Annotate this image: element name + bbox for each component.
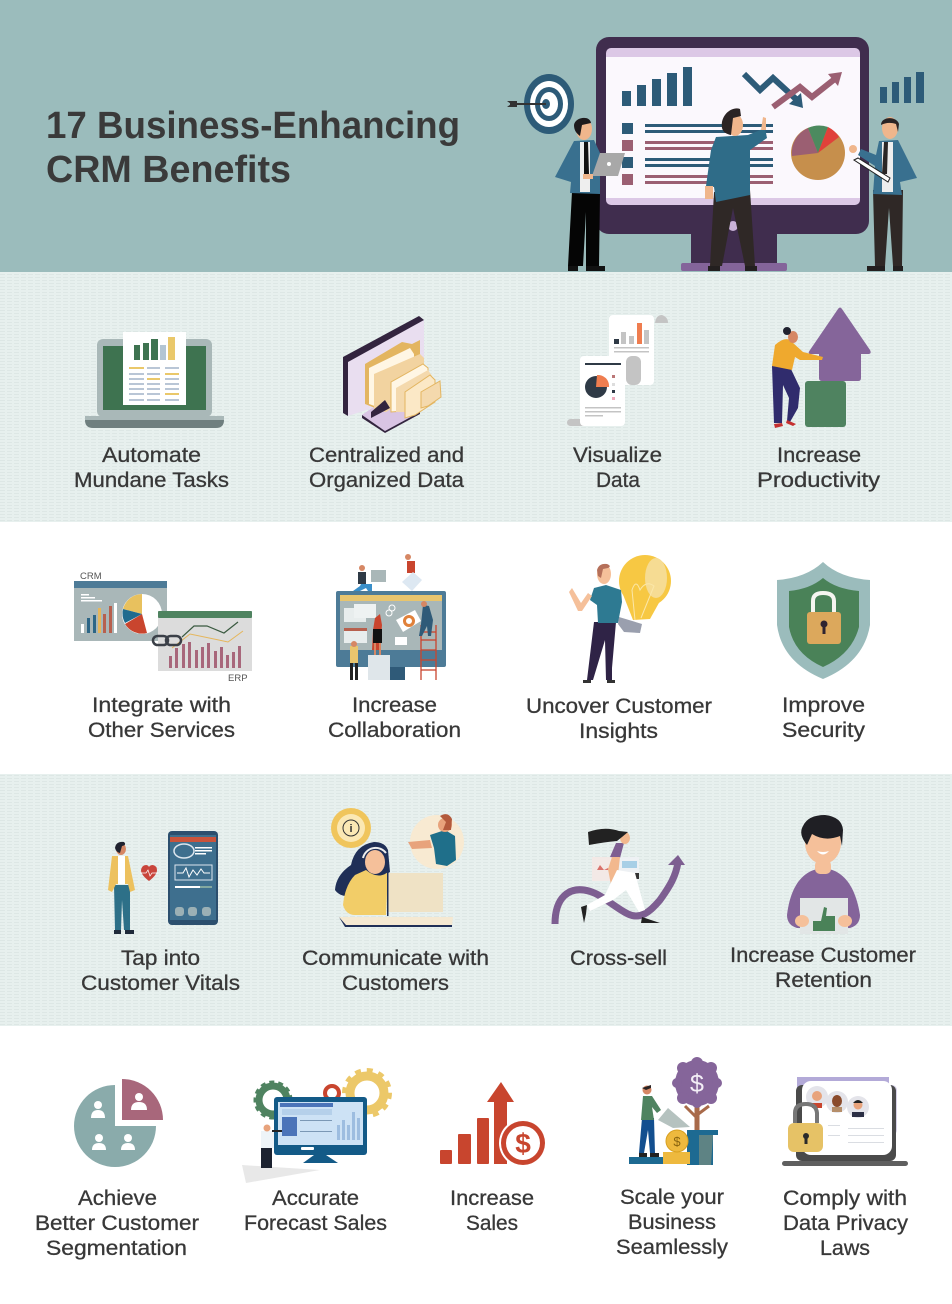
label: Improve: [782, 694, 865, 717]
item: Increase Sales: [440, 1082, 547, 1235]
label: [302, 947, 489, 995]
label: Cross-sell: [570, 947, 667, 970]
item: Improve Security: [777, 562, 870, 742]
label: Tap into: [121, 947, 200, 970]
label: Segmentation: [46, 1237, 187, 1260]
label: [74, 444, 229, 492]
label: Centralized and: [309, 444, 464, 467]
label: Other Services: [88, 719, 235, 742]
label: [526, 695, 712, 743]
icon: monitor with gears: [242, 1070, 390, 1183]
label: Accurate: [272, 1187, 359, 1210]
label: Business: [628, 1211, 716, 1234]
icon: segmented pie with people: [74, 1079, 163, 1167]
label: Scale your: [620, 1186, 724, 1209]
small bar chart right: [880, 72, 924, 103]
arrow: zigzag up: [773, 72, 842, 107]
item: Communicate with Customers: [302, 808, 489, 995]
label: Seamlessly: [616, 1236, 729, 1259]
icon: support agent and caller: i: [349, 823, 353, 835]
item: Comply with Data Privacy Laws: [782, 1077, 909, 1260]
label: Automate: [102, 444, 201, 467]
icon: woman pushing arrow: [772, 308, 871, 428]
icon: CRM and ERP windows: [74, 571, 252, 684]
icon: laptop with report: [85, 332, 224, 428]
item: Uncover Customer Insights: [526, 555, 712, 743]
icon: man with phone and heart: [108, 831, 218, 934]
item: Accurate Forecast Sales: [242, 1070, 390, 1235]
item: Cross-sell: [555, 829, 685, 970]
icon: monitor: [596, 37, 869, 271]
icon: CRM and ERP windows: CRM: [80, 571, 102, 582]
label: Better Customer: [35, 1212, 199, 1235]
title: CRM Benefits: [46, 149, 291, 191]
item: Visualize Data: [567, 315, 668, 492]
label: Insights: [579, 720, 658, 743]
label: [244, 1187, 387, 1235]
item: Tap into Customer Vitals: [81, 831, 240, 995]
label: Sales: [466, 1212, 518, 1235]
icon: CRM and ERP windows: ERP: [228, 673, 248, 684]
label: Achieve: [78, 1187, 157, 1210]
label: Forecast Sales: [244, 1212, 387, 1235]
icon: money tree: $: [673, 1134, 681, 1149]
label: Increase: [352, 694, 437, 717]
label: Increase: [450, 1187, 534, 1210]
label: Security: [782, 719, 866, 742]
textured band row 1: [0, 272, 952, 522]
figure: center man pointing: [705, 108, 767, 271]
label: [757, 444, 881, 492]
icon: man with light bulb: [569, 555, 671, 683]
label: Customer Vitals: [81, 972, 240, 995]
item: Achieve Better Customer Segmentation: [35, 1079, 199, 1260]
item: Increase Collaboration: [328, 554, 461, 742]
label: Communicate with: [302, 947, 489, 970]
item: Scale your Business Seamlessly: [616, 1057, 729, 1259]
pie chart on screen: [791, 126, 845, 180]
item: Integrate with Other Services: [74, 571, 252, 742]
label: Increase: [777, 444, 861, 467]
item: Increase Customer Retention: [730, 815, 916, 992]
item: Automate Mundane Tasks: [74, 332, 229, 492]
label: Laws: [820, 1237, 870, 1260]
label: Comply with: [783, 1187, 907, 1210]
label: [783, 1187, 909, 1260]
label: [616, 1186, 729, 1259]
label: Integrate with: [92, 694, 231, 717]
icon: smiling man with thumbs up: [787, 815, 860, 934]
icon: woman running with arrow: [555, 829, 685, 924]
icon: support agent and caller: [331, 808, 464, 927]
label: Data: [596, 469, 640, 492]
label: Uncover Customer: [526, 695, 712, 718]
label: Productivity: [757, 469, 881, 492]
label: Retention: [775, 969, 872, 992]
label: Increase Customer: [730, 944, 916, 967]
icon: red bars, arrow and dollar: [440, 1082, 547, 1167]
icon: red bars, arrow and dollar: $: [515, 1128, 531, 1159]
label: [730, 944, 916, 992]
header illustration: [507, 37, 924, 271]
label: [88, 694, 235, 742]
bar chart on screen: [622, 67, 692, 106]
label: Organized Data: [309, 469, 464, 492]
label: [450, 1187, 534, 1235]
icon: target: [507, 74, 574, 134]
label: [309, 444, 464, 492]
arrow: zigzag down: [744, 74, 803, 108]
header band: [0, 0, 952, 272]
title: 17 Business-Enhancing: [46, 105, 460, 147]
icon: shield with padlock: [777, 562, 870, 679]
textured band row 3: [0, 774, 952, 1026]
label: [81, 947, 240, 995]
figure: left man with laptop: [555, 118, 625, 271]
label: [573, 444, 662, 492]
icon: report scrolls: [567, 315, 668, 426]
label: Collaboration: [328, 719, 461, 742]
label: Mundane Tasks: [74, 469, 229, 492]
label: Visualize: [573, 444, 662, 467]
icon: laptop with profiles and padlock: [782, 1077, 908, 1166]
icon: money tree: [629, 1057, 722, 1165]
label: Data Privacy: [783, 1212, 909, 1235]
label: [782, 694, 866, 742]
label: Customers: [342, 972, 449, 995]
item: Centralized and Organized Data: [309, 316, 464, 492]
icon: monitor with folders: [343, 316, 441, 433]
title: [46, 105, 460, 191]
list rows on screen: [622, 123, 773, 185]
label: [35, 1187, 199, 1260]
item: Increase Productivity: [757, 308, 881, 492]
icon: money tree: $: [690, 1070, 704, 1098]
label: [328, 694, 461, 742]
icon: team around monitor: [336, 554, 446, 680]
figure: right man with clipboard: [849, 117, 917, 271]
